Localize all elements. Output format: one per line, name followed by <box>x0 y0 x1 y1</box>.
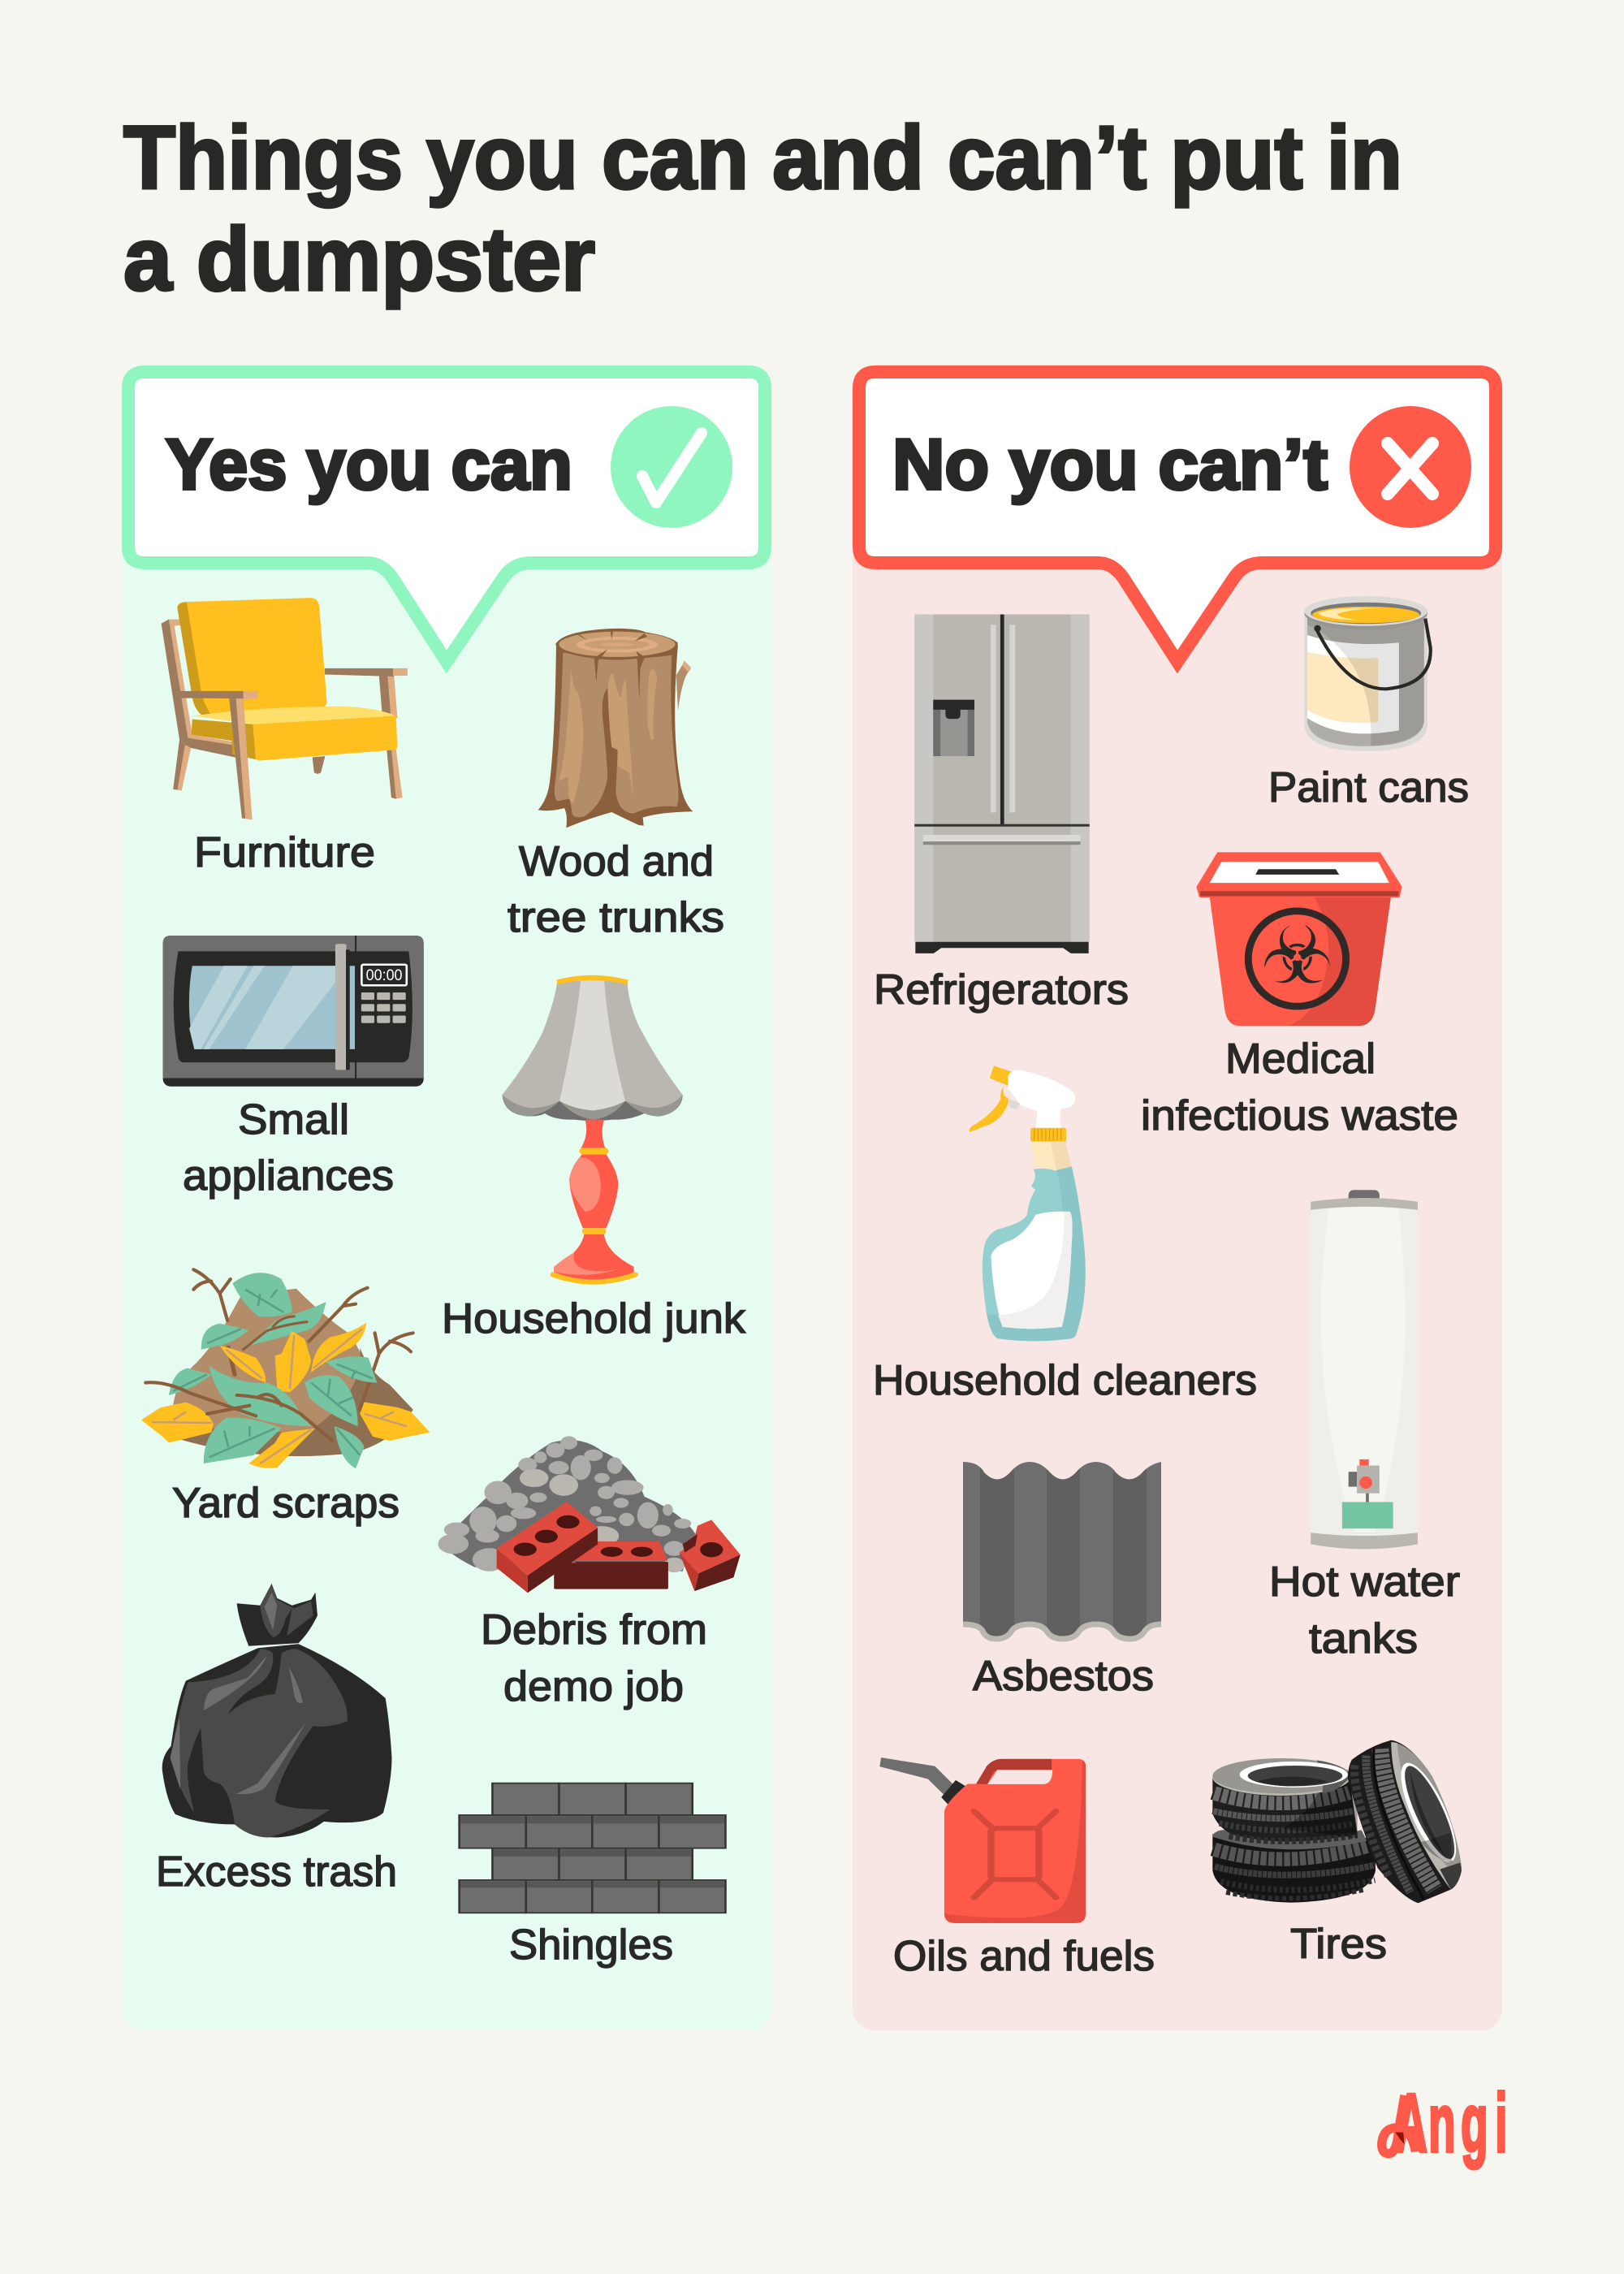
panel background: yes <box>122 374 771 2030</box>
title: a dumpster <box>123 210 595 309</box>
icon: armchair <box>162 598 408 819</box>
icon: spray bottle <box>970 1066 1086 1341</box>
item: shingles <box>460 1783 725 1969</box>
item: debris from demo job <box>438 1436 741 1710</box>
item: tires <box>1212 1740 1466 1968</box>
icon: biohazard bin <box>1198 854 1401 1026</box>
label: debris from demo job: Debris from <box>481 1606 707 1654</box>
item: hot water tanks <box>1269 1190 1460 1662</box>
label: shingles: Shingles <box>509 1922 673 1969</box>
icon: refrigerator <box>914 615 1090 953</box>
icon: corrugated asbestos sheet <box>963 1458 1161 1645</box>
label: asbestos: Asbestos <box>973 1653 1154 1700</box>
icon: water heater <box>1311 1190 1418 1549</box>
icon: yard scrap pile <box>141 1269 430 1468</box>
title <box>123 108 1402 309</box>
icon: paint can <box>1304 596 1431 751</box>
label: small appliances: appliances <box>183 1152 394 1200</box>
icon: stacked tires <box>1212 1740 1466 1903</box>
label: furniture: Furniture <box>194 829 375 876</box>
label: debris from demo job: demo job <box>503 1663 684 1710</box>
icon: trash bag <box>162 1584 391 1837</box>
speech bubble: yes you can <box>128 372 765 662</box>
item: household cleaners <box>873 1066 1257 1404</box>
item: asbestos <box>963 1458 1161 1700</box>
label: medical infectious waste <box>1141 1035 1458 1139</box>
item: refrigerators <box>874 615 1129 1014</box>
item: paint cans <box>1268 596 1469 811</box>
label: small appliances: Small <box>238 1096 349 1143</box>
item: excess trash <box>156 1584 397 1896</box>
icon: x mark <box>1350 406 1471 528</box>
item: medical infectious waste <box>1141 854 1458 1139</box>
label: tires: Tires <box>1290 1921 1387 1968</box>
item: household junk <box>442 976 746 1342</box>
label: medical infectious waste: Medical <box>1225 1035 1376 1083</box>
icon: jerry can <box>880 1758 1086 1923</box>
icon: microwave <box>163 936 424 1087</box>
label: wood and tree trunks <box>508 838 724 941</box>
label: debris from demo job <box>481 1606 707 1710</box>
heading: yes you can: Yes you can <box>166 424 572 504</box>
icon: table lamp <box>502 976 683 1282</box>
label: paint cans: Paint cans <box>1268 764 1469 811</box>
logo: Angi: Angi <box>1395 2077 1507 2169</box>
panel background: no <box>853 374 1502 2030</box>
item: small appliances <box>163 936 424 1200</box>
label: excess trash: Excess trash <box>156 1848 397 1896</box>
label: household junk: Household junk <box>442 1295 746 1342</box>
label: small appliances <box>183 1096 394 1200</box>
icon: shingles stack <box>460 1783 725 1913</box>
label: wood and tree trunks: tree trunks <box>508 894 724 941</box>
label: hot water tanks <box>1269 1559 1460 1662</box>
label: medical infectious waste: infectious waste <box>1141 1092 1458 1139</box>
speech bubble: no you can't <box>859 372 1496 662</box>
item: yard scraps <box>141 1269 430 1527</box>
panel: no you can't <box>853 372 1502 2030</box>
label: household cleaners: Household cleaners <box>873 1357 1257 1404</box>
item: furniture <box>162 598 408 876</box>
panel: yes you can <box>122 372 771 2030</box>
heading: no you can't: No you can’t <box>892 424 1328 504</box>
label: hot water tanks: tanks <box>1309 1615 1418 1662</box>
icon: microwave: 00:00 <box>366 966 403 984</box>
label: hot water tanks: Hot water <box>1269 1559 1460 1606</box>
title: Things you can and can’t put in <box>123 108 1402 208</box>
label: oils and fuels: Oils and fuels <box>893 1933 1155 1980</box>
item: wood and tree trunks <box>508 629 724 941</box>
item: oils and fuels <box>880 1758 1155 1980</box>
icon: check mark <box>611 406 732 528</box>
icon: rubble and bricks <box>438 1436 741 1593</box>
label: yard scraps: Yard scraps <box>172 1480 400 1527</box>
icon: biohazard bin: ☣ <box>1260 910 1333 1002</box>
icon: tree stump <box>538 629 693 828</box>
label: wood and tree trunks: Wood and <box>519 838 714 885</box>
label: refrigerators: Refrigerators <box>874 966 1129 1014</box>
